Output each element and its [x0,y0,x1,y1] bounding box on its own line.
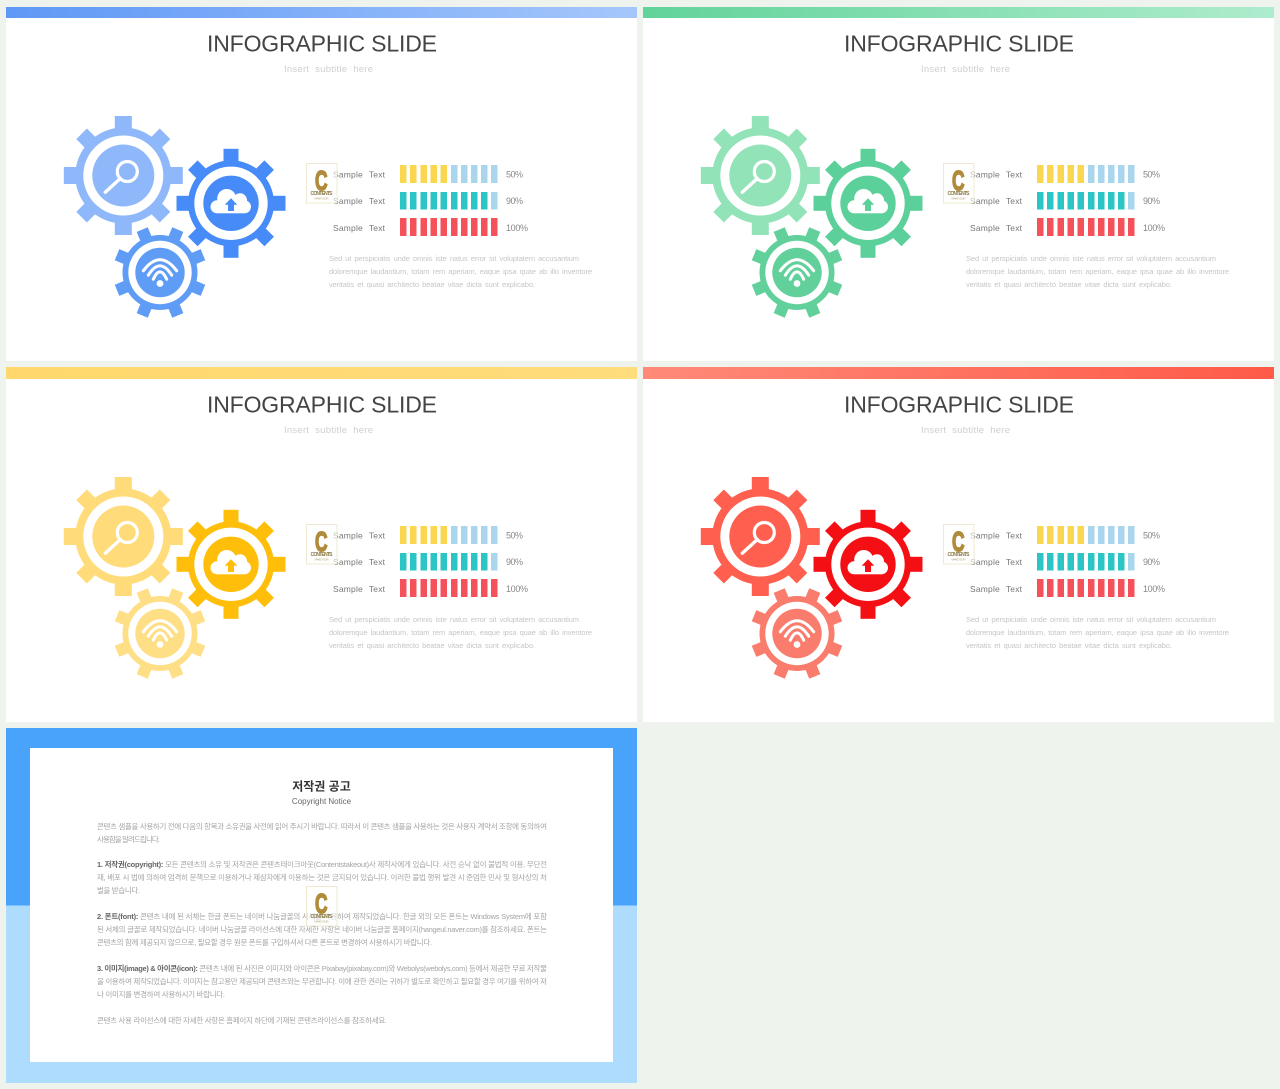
bar chart: 100% [1143,584,1165,594]
icon: search gear [64,477,183,596]
text block: font [97,911,547,947]
bar chart: Sample Text [970,530,1023,540]
watermark logo: MAKE YOUR [952,196,966,200]
text block: Sed ut perspiciatis unde omnis iste natus error sit voluptatem accusantium [966,254,1216,263]
text block: font: 콘텐츠의 함께 제공되지 않으므로, 필요할 경우 원문 폰트를 구입하셔서 다른 폰트로 변경하여 사용하시기 바랍니다. [97,937,432,947]
bar chart: 100% [1143,223,1165,233]
watermark logo: C [952,165,965,196]
text block [329,254,592,289]
text block [329,615,592,650]
watermark logo: MAKE YOUR [952,558,966,562]
watermark logo [944,524,974,564]
text block: veritatis et quasi architecto beatae vitae dicta sunt explicabo. [966,641,1172,650]
icon: cloud gear [814,510,922,619]
text block: license note: 콘텐츠 사용 라이선스에 대한 자세한 사항은 홈페이지 하단에 기재된 콘텐츠라이선스를 참조하세요. [97,1015,387,1025]
bar chart: Sample Text [970,223,1023,233]
watermark logo [306,886,337,926]
watermark logo: C [952,526,965,557]
subtitle: Insert subtitle here [921,64,1010,75]
watermark logo: CONTENTS [948,191,970,197]
text block: veritatis et quasi architecto beatae vitae dicta sunt explicabo. [329,280,535,289]
text block [966,254,1229,289]
watermark logo [306,524,337,564]
text block: Sed ut perspiciatis unde omnis iste natus error sit voluptatem accusantium [329,254,579,263]
bar chart: Sample Text [333,557,386,567]
bar chart: 90% [1143,557,1160,567]
bar chart [333,165,528,236]
watermark logo [306,164,337,203]
bar chart: Sample Text [970,557,1023,567]
bar chart: Sample Text [333,530,386,540]
panel: red slide [643,367,1274,722]
bar chart [970,165,1165,236]
text block: veritatis et quasi architecto beatae vitae dicta sunt explicabo. [966,280,1172,289]
icon: cloud gear [814,149,922,258]
panel: copyright notice [6,728,637,1083]
watermark logo: C [315,888,328,919]
icon: wifi gear [99,212,221,333]
icon: cloud gear [176,149,286,258]
bar chart: 50% [506,530,523,540]
watermark logo: CONTENTS [948,552,970,558]
icon: search gear [701,116,820,235]
bar chart: Sample Text [970,584,1023,594]
bar chart: 90% [506,196,523,206]
watermark logo [944,164,974,203]
watermark logo: C [315,165,328,196]
text block: copyright: 벌을 받습니다. [97,885,140,895]
title: INFOGRAPHIC SLIDE [844,30,1074,56]
text block: image and icon [97,963,547,999]
watermark logo: CONTENTS [310,914,333,920]
title: INFOGRAPHIC SLIDE [844,392,1074,418]
text block: Sed ut perspiciatis unde omnis iste natus error sit voluptatem accusantium [966,615,1216,624]
bar chart: Sample Text [333,170,386,180]
text block: doloremque laudantium, totam rem aperiam, eaque ipsa quae ab illo inventore [966,267,1229,276]
bar chart: Sample Text [333,584,386,594]
icon: search gear [701,477,820,596]
watermark logo: MAKE YOUR [314,920,329,924]
top bar: blue [6,7,637,18]
icon: wifi gear [99,573,221,694]
bar chart: 100% [506,223,528,233]
text block: font: 2. 폰트(font): 콘텐츠 내에 된 서체는 한글 폰트는 네이버 나눔글꼴의 서체를 사용하여 제작되었습니다. 한글 외의 모든 폰트는 Windows System에 포함 [97,911,547,921]
text block: intro [97,821,547,844]
bar chart: 50% [1143,530,1160,540]
subtitle: Insert subtitle here [284,425,373,436]
top bar: green [643,7,1274,18]
text block: copyright: 재, 배포 시 법에 의하여 엄격히 문책으로 이용하거나 제삼자에게 이용하는 것은 금지되어 있습니다. 이러한 불법 행위 발견 시 준엄한 민사 및 형사상의 처 [97,872,547,882]
title: INFOGRAPHIC SLIDE [207,392,437,418]
text block: font: 된 서체의 글꼴로 제작되었습니다. 네이버 나눔글꼴 라이선스에 대한 자세한 사항은 네이버 나눔글꼴 홈페이지(hangeul.naver.com)를 참조하세요. 폰트는 [97,924,547,934]
icon: wifi gear [736,573,858,694]
bar chart: Sample Text [970,196,1023,206]
bar chart: 90% [506,557,523,567]
watermark logo: CONTENTS [310,552,333,558]
text block: image and icon: 나 이미지를 변경하여 사용하시기 바랍니다. [97,989,225,999]
subheading: Copyright Notice [292,797,352,806]
text block: image and icon: 을 이용하여 제작되었습니다. 이미지는 참고용만 제공되며 콘텐츠와는 무관합니다. 이에 관한 권리는 귀하가 별도로 확인하고 필요할 경우 여기를 위하여 저 [97,976,547,986]
icon: search gear [64,116,183,235]
bar chart [970,526,1165,597]
bar chart: 50% [1143,170,1160,180]
icon: wifi gear [736,212,858,333]
subtitle: Insert subtitle here [921,425,1010,436]
heading: 저작권 공고 [292,778,351,794]
bar chart: Sample Text [970,170,1023,180]
text block: copyright [97,859,547,895]
text block: doloremque laudantium, totam rem aperiam, eaque ipsa quae ab illo inventore [329,628,592,637]
text block: intro: 콘텐츠 샘플을 사용하기 전에 다음의 항목과 소유권을 사전에 읽어 주시기 바랍니다. 따라서 이 콘텐츠 샘플을 사용하는 것은 사용자 계약서 조항에 동의하여 [97,821,547,831]
text block: copyright: 1. 저작권(copyright): 모든 콘텐츠의 소유 및 저작권은 콘텐츠테이크아웃(Contentstakeout)사 제작사에게 있습니다. 사전 승낙 없이 불법적 이용, 무단전 [97,859,547,869]
top bar: red [643,367,1274,379]
watermark logo: CONTENTS [310,191,333,197]
text block: Sed ut perspiciatis unde omnis iste natus error sit voluptatem accusantium [329,615,579,624]
bar chart: Sample Text [333,196,386,206]
panel: blue slide [6,7,637,361]
bar chart: 100% [506,584,528,594]
text block [966,615,1229,650]
watermark logo: C [315,526,328,557]
text block: veritatis et quasi architecto beatae vitae dicta sunt explicabo. [329,641,535,650]
bar chart: 90% [1143,196,1160,206]
bar chart: Sample Text [333,223,386,233]
text block: doloremque laudantium, totam rem aperiam, eaque ipsa quae ab illo inventore [966,628,1229,637]
bar chart: 50% [506,170,523,180]
subtitle: Insert subtitle here [284,64,373,75]
watermark logo: MAKE YOUR [314,558,329,562]
icon: cloud gear [176,510,286,619]
panel: yellow slide [6,367,637,722]
bar chart [333,526,528,597]
top bar: yellow [6,367,637,379]
panel: green slide [643,7,1274,361]
title: INFOGRAPHIC SLIDE [207,30,437,56]
text block: intro: 사용함을 알려드립니다. [97,834,160,844]
text block: image and icon: 3. 이미지(image) & 아이콘(icon): 콘텐츠 내에 된 사진은 이미지와 아이콘은 Pixabay(pixabay.com)와 Webolys(webolys.com) 등에서 제공한 무료 저작물 [97,963,547,973]
text block: doloremque laudantium, totam rem aperiam, eaque ipsa quae ab illo inventore [329,267,592,276]
watermark logo: MAKE YOUR [314,196,329,200]
